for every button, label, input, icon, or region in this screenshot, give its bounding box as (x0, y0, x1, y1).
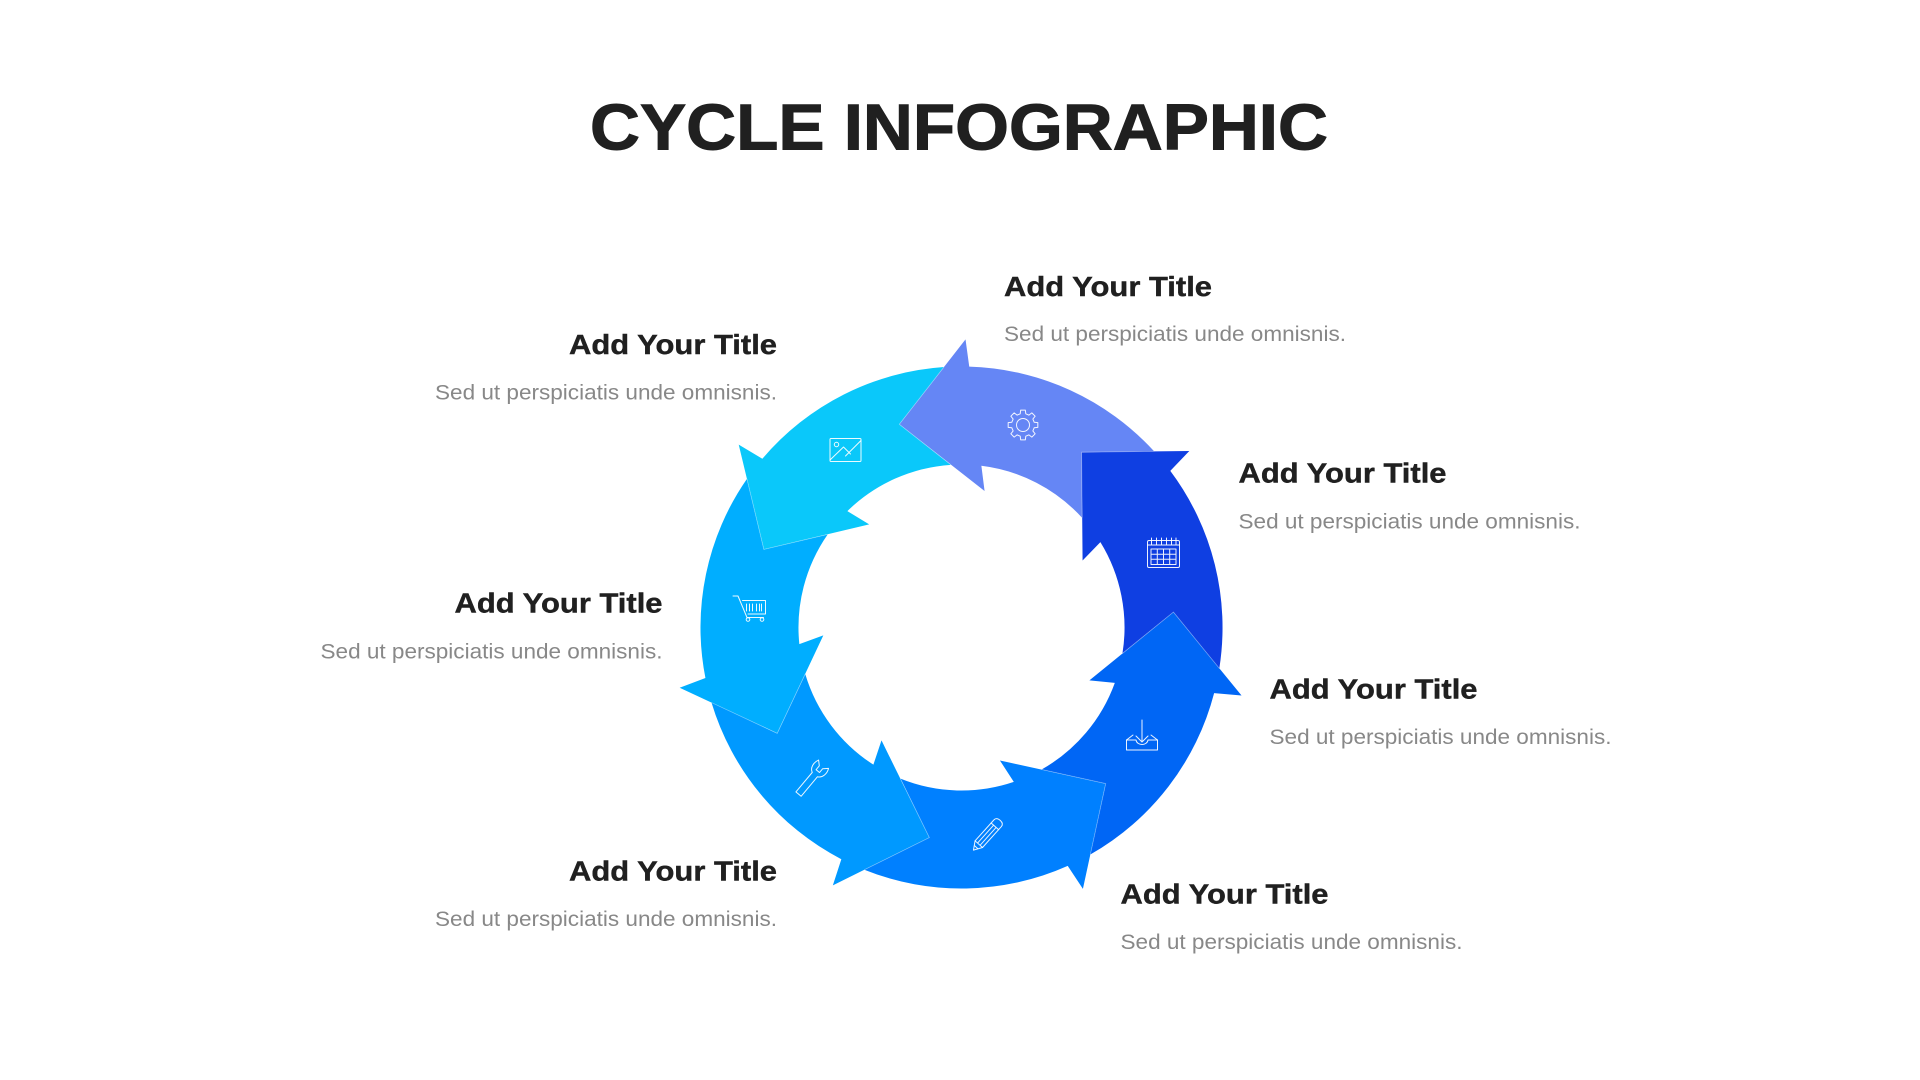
icon: pencil (970, 817, 1004, 853)
label: pencil step: Add Your Title (1120, 878, 1328, 910)
icon: picture (830, 438, 861, 462)
icon: inbox tray (1126, 720, 1158, 750)
label: cart step: Sed ut perspiciatis unde omnisnis. (320, 640, 662, 664)
title: CYCLE INFOGRAPHIC (590, 90, 1328, 164)
label: image step: Add Your Title (569, 329, 777, 360)
cycle diagram (638, 297, 1307, 971)
arrow: calendar segment (1009, 399, 1307, 710)
icon: calendar (1148, 538, 1180, 568)
label: calendar step: Sed ut perspiciatis unde omnisnis. (1238, 510, 1580, 534)
arrow: cart segment (638, 464, 868, 752)
label: gear step (1004, 271, 1346, 346)
icon: wrench (792, 759, 830, 799)
label: gear step: Add Your Title (1004, 271, 1212, 302)
label: gear step: Sed ut perspiciatis unde omnisnis. (1004, 322, 1346, 346)
label: calendar step (1238, 458, 1580, 534)
arrow: pencil segment (835, 699, 1143, 971)
arrow: gear segment (899, 339, 1154, 518)
label: image step: Sed ut perspiciatis unde omnisnis. (435, 380, 777, 404)
label: cart step (320, 588, 662, 664)
label: wrench step: Add Your Title (569, 856, 777, 886)
label: pencil step: Sed ut perspiciatis unde omnisnis. (1120, 930, 1462, 954)
icon: gear (1008, 410, 1038, 440)
arrow: image segment (697, 297, 996, 608)
label: inbox step (1270, 674, 1612, 749)
label: image step (435, 329, 777, 404)
label: pencil step (1120, 878, 1462, 954)
label: calendar step: Add Your Title (1238, 458, 1446, 488)
label: inbox step: Add Your Title (1270, 674, 1478, 704)
label: cart step: Add Your Title (454, 588, 662, 618)
label: wrench step (435, 856, 777, 931)
label: wrench step: Sed ut perspiciatis unde omnisnis. (435, 907, 777, 931)
icon: shopping cart (733, 596, 766, 621)
arrow: inbox segment (1026, 591, 1256, 879)
arrow: wrench segment (663, 643, 970, 914)
label: inbox step: Sed ut perspiciatis unde omnisnis. (1270, 725, 1612, 749)
